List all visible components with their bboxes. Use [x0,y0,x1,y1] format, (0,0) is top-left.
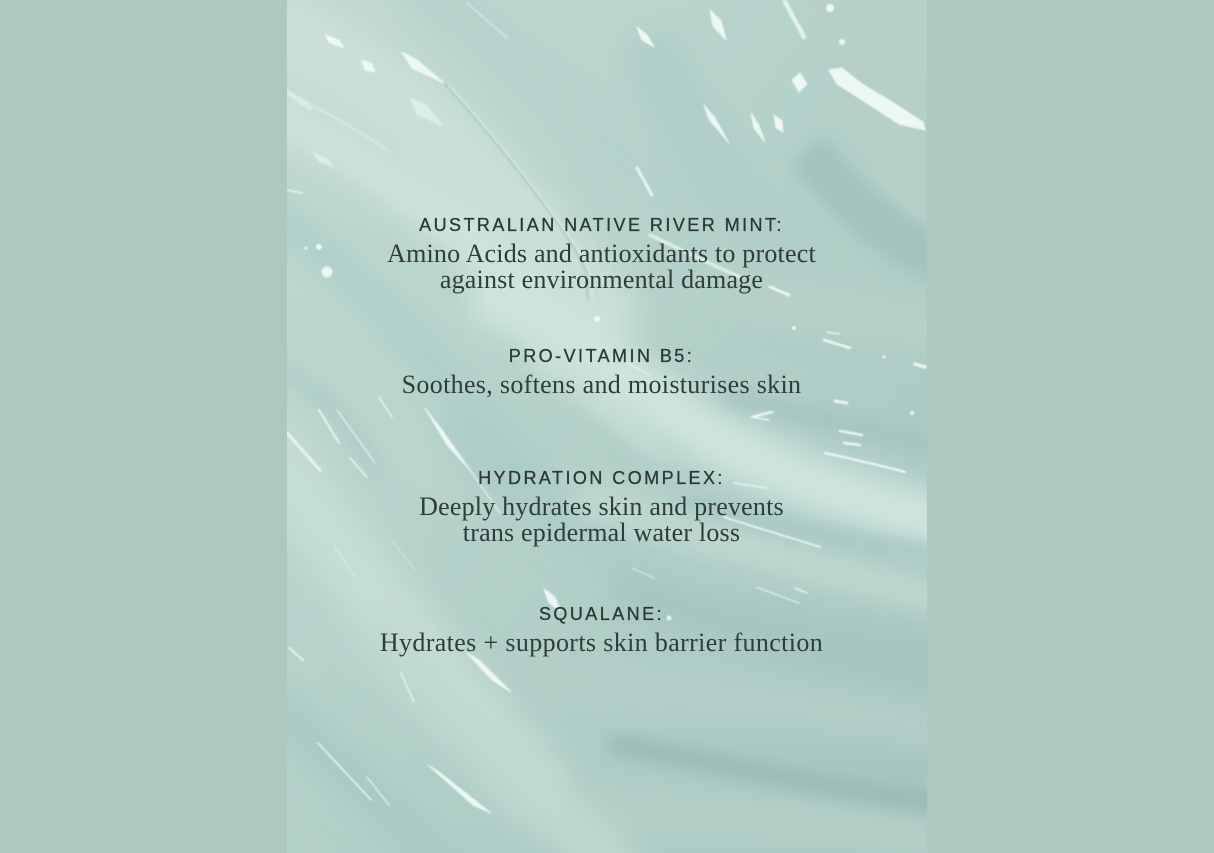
cream fold at top right [807,0,947,262]
text: hydration description [419,492,784,547]
text: river mint description: Amino Acids and antioxidants to protect [387,239,816,268]
light fold edge at middle [522,300,687,470]
heading: Hydration Complex: HYDRATION COMPLEX: [478,468,725,488]
heading: Pro-Vitamin B5: PRO-VITAMIN B5: [509,346,694,366]
heading: Squalane: SQUALANE: [539,604,664,624]
text: river mint description: against environmental damage [440,265,763,294]
heading: Australian Native River Mint: AUSTRALIAN NATIVE RIVER MINT: [419,215,784,235]
text: pro-vitamin description: Soothes, softens and moisturises skin [402,370,801,399]
text: hydration description: Deeply hydrates skin and prevents [419,492,784,521]
text: squalane description: Hydrates + supports skin barrier function [380,628,823,657]
text: river mint description [387,239,816,294]
text: hydration description: trans epidermal water loss [463,518,740,547]
panel: cream texture photo background [287,0,927,853]
